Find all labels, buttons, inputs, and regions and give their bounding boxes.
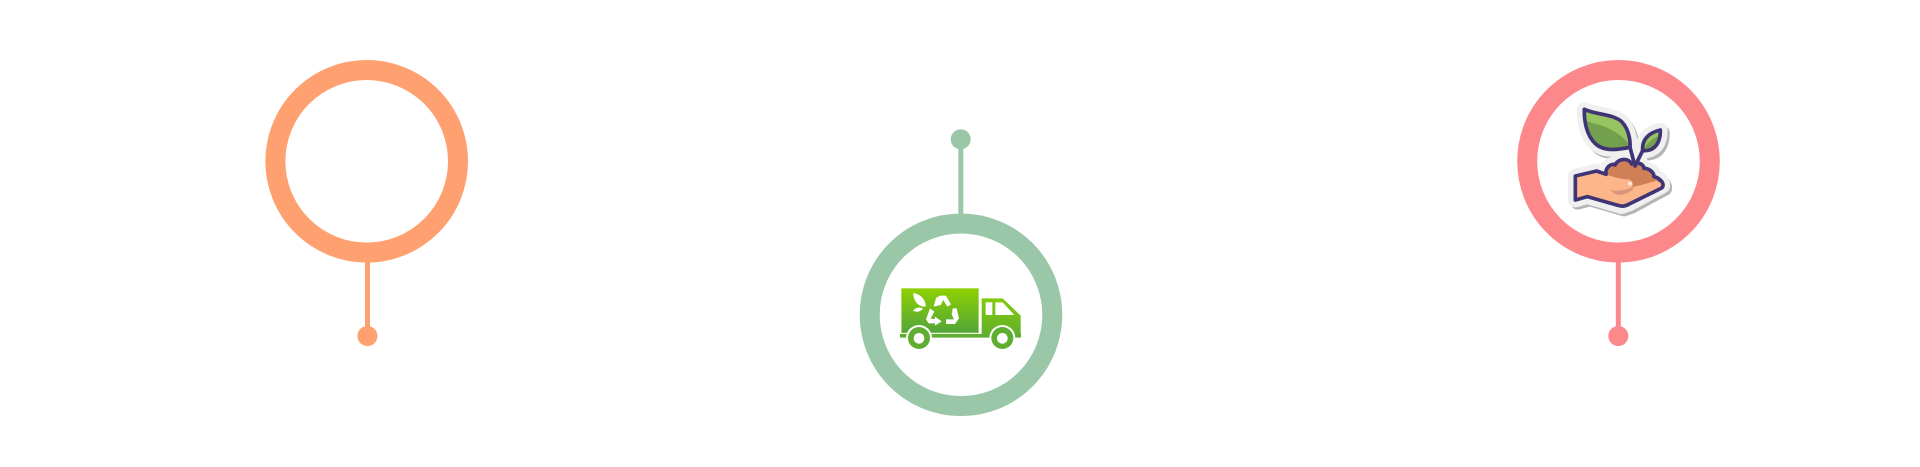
hand — [1575, 171, 1663, 206]
large leaf — [1584, 109, 1630, 150]
truck cab — [982, 298, 1021, 334]
leaf emblem — [913, 293, 926, 312]
icon: hand holding seedling — [1575, 109, 1665, 209]
red ring with pin — [1527, 70, 1710, 346]
truck cargo box — [901, 288, 979, 333]
truck chassis — [900, 334, 1021, 338]
small leaf — [1643, 130, 1660, 151]
icon: recycling truck — [900, 288, 1021, 351]
sticker backing — [1575, 109, 1663, 207]
recycling arrows — [926, 296, 959, 326]
stems — [1630, 147, 1643, 166]
soil — [1606, 159, 1663, 193]
sticker shadow — [1578, 112, 1665, 209]
rear wheel — [906, 325, 932, 351]
truck window rear — [986, 302, 992, 315]
green ring with pin — [870, 129, 1052, 406]
truck window front — [995, 302, 1014, 315]
front wheel — [989, 325, 1015, 351]
orange ring with pin — [275, 70, 458, 346]
